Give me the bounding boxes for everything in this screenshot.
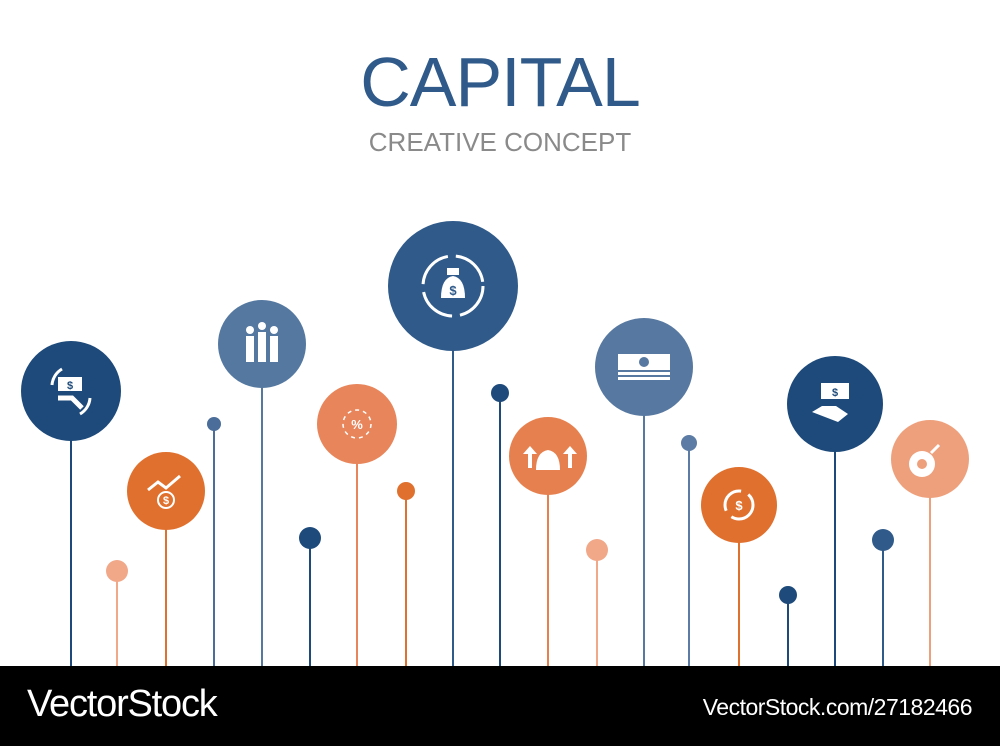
subtitle: CREATIVE CONCEPT xyxy=(369,127,631,157)
circle 5: money bag cycle xyxy=(388,221,518,351)
circle 1: exchange money xyxy=(21,341,121,441)
circle 6: bag with arrows xyxy=(509,417,587,495)
circle 1: exchange money: $ xyxy=(67,380,73,392)
footer url: VectorStock.com/27182466 xyxy=(703,694,972,720)
dot xyxy=(681,435,697,451)
circle 8: dollar refresh xyxy=(701,467,777,543)
dot xyxy=(872,529,894,551)
circle 3: team xyxy=(218,300,306,388)
circle 4: percent xyxy=(317,384,397,464)
circle 2: growth money: $ xyxy=(163,495,169,507)
circle 7: cash stack xyxy=(595,318,693,416)
dot xyxy=(397,482,415,500)
title: CAPITAL xyxy=(360,43,640,121)
circle 2: growth money xyxy=(127,452,205,530)
dot xyxy=(299,527,321,549)
dot xyxy=(779,586,797,604)
footer brand: VectorStock xyxy=(27,683,217,725)
circle 9: handshake money: $ xyxy=(832,387,838,399)
dot xyxy=(491,384,509,402)
circle 4: percent: % xyxy=(351,417,363,432)
circle 9: handshake money xyxy=(787,356,883,452)
circle 8: dollar refresh: $ xyxy=(735,498,743,513)
dot xyxy=(586,539,608,561)
dot xyxy=(207,417,221,431)
dot xyxy=(106,560,128,582)
circle 10: bomb gear xyxy=(891,420,969,498)
circle 5: money bag cycle: $ xyxy=(449,283,457,298)
footer bar xyxy=(0,666,1000,746)
